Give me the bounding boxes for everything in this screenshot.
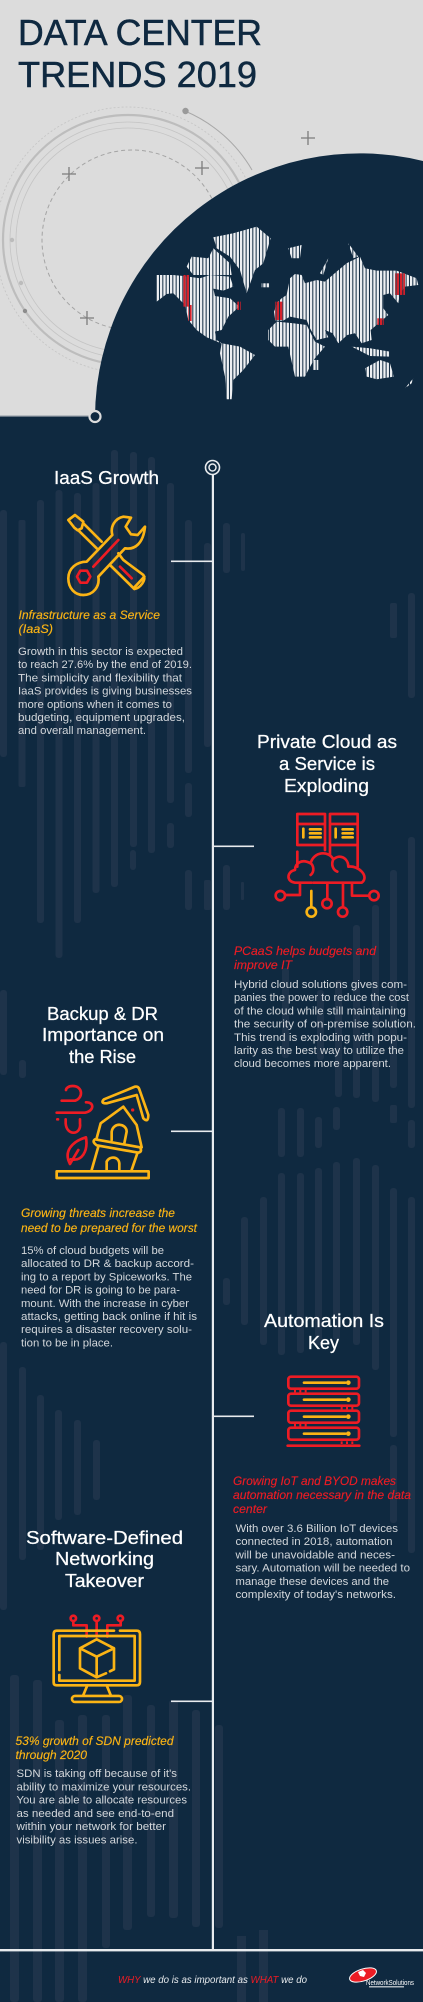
footer tagline: WHY we do is as important as WHAT we do bbox=[118, 1974, 307, 1986]
heading: IaaS Growth bbox=[54, 467, 159, 488]
panel: IaaS growth bbox=[18, 467, 193, 737]
body text: ability to maximize your resources. bbox=[16, 1781, 191, 1793]
body text bbox=[18, 646, 193, 737]
footer logo bbox=[348, 1965, 414, 1988]
subheading bbox=[234, 945, 377, 972]
body text: cloud becomes more apparent. bbox=[234, 1058, 391, 1070]
body text: The simplicity and flexibility that bbox=[18, 672, 182, 684]
panel: private cloud bbox=[234, 731, 416, 1070]
panel: automation bbox=[233, 1310, 412, 1601]
subheading bbox=[18, 609, 161, 636]
body text: complexity of today's networks. bbox=[236, 1589, 396, 1601]
body text: of the cloud while still maintaining bbox=[234, 1005, 406, 1017]
body text: and overall management. bbox=[18, 725, 146, 737]
subheading: need to be prepared for the worst bbox=[21, 1222, 198, 1235]
subheading: (IaaS) bbox=[18, 623, 53, 636]
subheading: Growing threats increase the bbox=[21, 1207, 176, 1220]
body text: sary. Automation will be needed to bbox=[236, 1563, 410, 1575]
dark globe semicircle bbox=[95, 153, 423, 420]
heading: Key bbox=[308, 1332, 340, 1353]
subheading bbox=[16, 1735, 174, 1762]
body text: 15% of cloud budgets will be bbox=[21, 1245, 164, 1257]
decorative orbit rings bbox=[0, 107, 261, 373]
faint background map stripes bbox=[0, 450, 415, 2002]
body text: the security of on-premise solution. bbox=[234, 1019, 416, 1031]
subheading: Growing IoT and BYOD makes bbox=[233, 1475, 396, 1488]
title: DATA CENTER bbox=[18, 12, 262, 53]
body text bbox=[234, 1523, 410, 1601]
footer logo: NetworkSolutions bbox=[366, 1980, 414, 1987]
subheading: PCaaS helps budgets and bbox=[234, 945, 377, 958]
subheading: Infrastructure as a Service bbox=[18, 609, 161, 622]
heading bbox=[26, 1527, 183, 1591]
panel: backup and DR bbox=[21, 1003, 198, 1349]
body text: With over 3.6 Billion IoT devices bbox=[236, 1523, 399, 1535]
heading bbox=[257, 731, 397, 796]
heading: a Service is bbox=[279, 753, 375, 774]
heading: Networking bbox=[55, 1548, 154, 1569]
world map bbox=[157, 227, 418, 399]
heading bbox=[264, 1310, 384, 1353]
heading: Backup & DR bbox=[47, 1003, 158, 1024]
subheading bbox=[21, 1207, 198, 1235]
body text: SDN is taking off because of it's bbox=[16, 1768, 178, 1780]
icon: monitor with cube bbox=[54, 1616, 140, 1702]
body text: budgeting, equipment upgrades, bbox=[18, 712, 185, 724]
body text: ing to a report by Spiceworks. The bbox=[21, 1271, 192, 1283]
body text bbox=[234, 979, 416, 1070]
body text: manage these devices and the bbox=[236, 1576, 389, 1588]
body text: to reach 27.6% by the end of 2019. bbox=[18, 659, 192, 671]
header baseline connector bbox=[0, 411, 100, 422]
body text: allocated to DR & backup accord- bbox=[21, 1258, 194, 1270]
heading: Importance on bbox=[42, 1024, 164, 1045]
subheading: center bbox=[233, 1503, 268, 1516]
subheading: 53% growth of SDN predicted bbox=[16, 1735, 174, 1748]
body text: Growth in this sector is expected bbox=[18, 646, 183, 658]
subheading bbox=[233, 1475, 412, 1516]
body text: IaaS provides is giving businesses bbox=[18, 686, 193, 698]
title bbox=[18, 12, 262, 95]
subheading: through 2020 bbox=[16, 1749, 88, 1762]
subheading: improve IT bbox=[234, 959, 293, 972]
icon: storm damaged house bbox=[57, 1086, 149, 1178]
timeline bbox=[171, 460, 254, 1950]
body text: connected in 2018, automation bbox=[236, 1536, 392, 1548]
body text: panies the power to reduce the cost bbox=[234, 992, 409, 1004]
heading bbox=[42, 1003, 164, 1067]
body text bbox=[15, 1768, 191, 1846]
heading: Exploding bbox=[284, 775, 369, 796]
heading: Private Cloud as bbox=[257, 731, 397, 752]
body text: will be unavoidable and neces- bbox=[234, 1549, 395, 1561]
body text: attacks, getting back online if hit is bbox=[21, 1311, 198, 1323]
heading: Takeover bbox=[65, 1570, 144, 1591]
body text: mount. With the increase in cyber bbox=[21, 1298, 189, 1310]
body text: visibility as issues arise. bbox=[16, 1834, 138, 1846]
body text: Hybrid cloud solutions gives com- bbox=[234, 979, 407, 991]
body text: need for DR is going to be para- bbox=[21, 1285, 180, 1297]
body text: within your network for better bbox=[15, 1821, 166, 1833]
body text: tion to be in place. bbox=[21, 1337, 113, 1349]
footer divider bbox=[0, 1949, 423, 1951]
panel: software-defined networking bbox=[15, 1527, 191, 1846]
header background bbox=[0, 0, 423, 416]
body text: You are able to allocate resources bbox=[16, 1794, 188, 1806]
body text: more options when it comes to bbox=[18, 699, 172, 711]
body text: larity as the best way to utilize the bbox=[234, 1045, 404, 1057]
heading: Software-Defined bbox=[26, 1527, 183, 1548]
title: TRENDS 2019 bbox=[18, 54, 257, 95]
body text: This trend is exploding with popu- bbox=[234, 1032, 407, 1044]
heading: the Rise bbox=[69, 1046, 136, 1067]
icon: server rack bbox=[288, 1377, 359, 1446]
icon: cloud servers bbox=[276, 814, 379, 917]
heading: Automation Is bbox=[264, 1310, 384, 1331]
subheading: automation necessary in the data bbox=[233, 1489, 412, 1502]
body text: requires a disaster recovery solu- bbox=[21, 1324, 192, 1336]
body text: as needed and see end-to-end bbox=[16, 1808, 174, 1820]
icon: crossed tools bbox=[68, 515, 145, 595]
plus marks bbox=[62, 131, 315, 325]
body text bbox=[21, 1245, 198, 1349]
